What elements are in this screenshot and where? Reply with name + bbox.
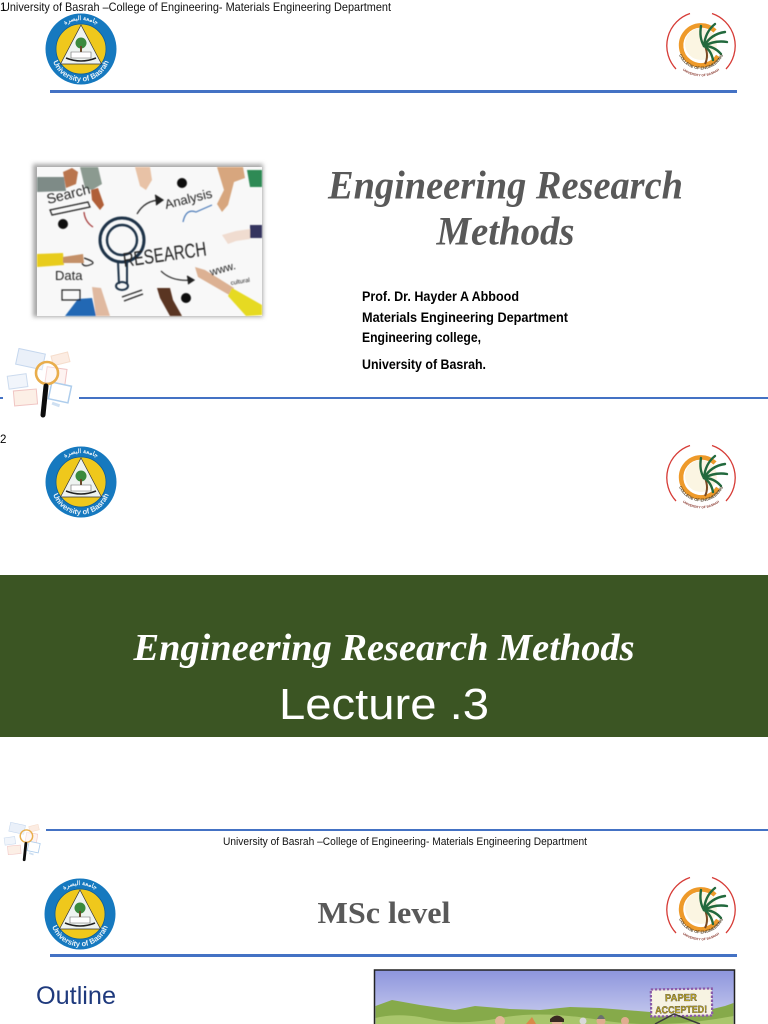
author block: Engineering college,	[362, 330, 481, 345]
slide 1 title	[327, 162, 683, 254]
author block: University of Basrah.	[362, 357, 486, 372]
photo labels: RESEARCH	[122, 238, 208, 272]
sign	[651, 988, 712, 1017]
sign: PAPER	[665, 993, 698, 1004]
logo: University of Basrah: University of Basrah	[54, 60, 109, 83]
header text slide 3: University of Basrah –College of Engineering- Materials Engineering Department	[223, 836, 587, 848]
logo: University of Basrah slide 3	[44, 878, 116, 950]
logo: College of Engineering	[666, 12, 736, 76]
magnifier	[100, 218, 144, 290]
logo: College of Engineering slide 3: UNIVERSITY OF BASRAH	[683, 932, 720, 940]
logo: University of Basrah slide 3: University of Basrah	[52, 924, 108, 948]
hands	[37, 177, 66, 192]
header rule	[50, 90, 737, 93]
photo labels	[45, 181, 250, 287]
photo labels: cultural	[230, 278, 250, 287]
logo: College of Engineering slide 3	[666, 876, 736, 940]
sign: ACCEPTED!	[655, 1005, 707, 1016]
author block: Materials Engineering Department	[362, 310, 568, 325]
logo: College of Engineering slide 2: COLLEGE OF ENGINEERING	[680, 486, 723, 502]
logo: College of Engineering slide 2: UNIVERSITY OF BASRAH	[683, 500, 720, 508]
author block: Prof. Dr. Hayder A Abbood	[362, 289, 519, 304]
logo: University of Basrah slide 2	[46, 446, 116, 518]
photo labels: Data	[55, 268, 83, 283]
sketches	[50, 195, 212, 301]
page number 2: 2	[0, 434, 6, 446]
logo: University of Basrah slide 3: جامعة البصرة	[63, 880, 97, 890]
cartoon: paper accepted	[374, 970, 734, 1024]
icon: magnifier small	[4, 822, 40, 860]
band title: Engineering Research Methods	[132, 627, 634, 669]
cups	[58, 219, 68, 229]
author block	[362, 289, 568, 372]
photo labels: Analysis	[163, 186, 214, 212]
photo labels: Search	[45, 181, 92, 207]
page number 1: 1	[0, 2, 6, 14]
slide 1 title: Engineering Research	[327, 162, 683, 208]
header text slide 1: University of Basrah –College of Engineering- Materials Engineering Department	[2, 0, 392, 14]
people in cartoon	[495, 1016, 505, 1024]
logo: University of Basrah: جامعة البصرة	[64, 15, 98, 25]
band subtitle: Lecture .3	[279, 680, 489, 729]
logo: University of Basrah slide 2: جامعة البصرة	[64, 448, 98, 458]
rule slide 3	[50, 954, 737, 957]
logo: University of Basrah slide 2: University of Basrah	[54, 492, 109, 516]
green title band	[0, 575, 768, 737]
logo: College of Engineering: COLLEGE OF ENGINEERING	[680, 54, 723, 70]
logo: College of Engineering: UNIVERSITY OF BASRAH	[683, 68, 720, 76]
photo labels: www.	[208, 260, 237, 279]
slide 3 heading: MSc level	[318, 895, 451, 930]
research photo	[33, 164, 263, 317]
icon: magnifier over documents	[7, 348, 71, 415]
footer rule slide 1	[0, 397, 768, 399]
header rule slide 3	[46, 829, 768, 831]
logo: College of Engineering slide 3: COLLEGE OF ENGINEERING	[680, 918, 723, 934]
outline heading: Outline	[36, 982, 116, 1010]
slide 1 title: Methods	[436, 208, 574, 254]
logo: College of Engineering slide 2	[666, 444, 736, 508]
logo: University of Basrah	[46, 14, 116, 84]
